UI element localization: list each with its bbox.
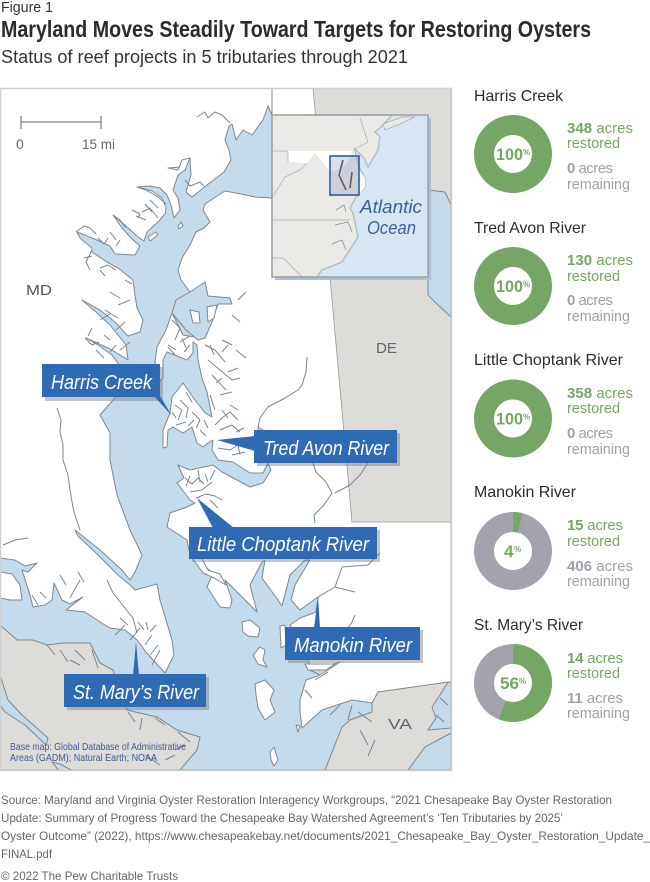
state label DE: DE: [376, 340, 397, 357]
stats: Manokin River: [567, 517, 633, 590]
water: Rappahannock: [0, 675, 48, 745]
stats: Little Choptank River: remaining: [567, 441, 630, 458]
source note: Update: Summary of Progress Toward the Chesapeake Bay Watershed Agreement’s ‘Ten Tributaries by 2025’: [1, 811, 563, 825]
source note: [1, 793, 650, 861]
donut chart: Little Choptank River 100%: %: [523, 412, 530, 422]
stats: St. Mary's River: 11 acres: [567, 690, 623, 707]
water: Delaware Bay: [428, 190, 451, 317]
donut chart: Harris Creek 100%: [484, 125, 542, 183]
donut chart: Tred Avon River 100%: %: [523, 280, 530, 289]
donut chart: Tred Avon River 100%: [484, 257, 542, 315]
water: Chester and inner rivers: [172, 282, 232, 340]
donut chart: St. Mary's River 56%: [484, 654, 542, 712]
callout: St. Mary's River: [64, 642, 209, 710]
creeks: [3, 112, 448, 765]
panel: Harris Creek: [474, 88, 633, 193]
stats: Little Choptank River: [567, 385, 633, 458]
panel: St. Mary's River: [474, 617, 630, 722]
callout: Little Choptank River: Little Choptank River: [197, 534, 370, 556]
stats: Manokin River: remaining: [567, 573, 630, 590]
source note: Source: Maryland and Virginia Oyster Restoration Interagency Workgroups, “2021 Chesapeake Bay Oyster Restoration: [1, 793, 612, 807]
stats: Tred Avon River: remaining: [567, 308, 630, 325]
land: Eastern Shore Virginia: [325, 682, 451, 770]
base map credit: Areas (GADM); Natural Earth; NOAA: [10, 752, 157, 764]
land: Delaware: [313, 88, 451, 522]
panel: Tred Avon River: [474, 220, 633, 325]
stats: St. Mary's River: 14 acres: [567, 650, 623, 667]
panel: Manokin River: [474, 484, 633, 590]
stats: St. Mary's River: remaining: [567, 705, 630, 722]
water: Chesapeake Bay: [0, 106, 451, 770]
source note: Oyster Outcome” (2022), https://www.chesapeakebay.net/documents/2021_Chesapeake_Bay_Oyster_Restoration_Update_: [1, 829, 650, 843]
scale bar: 0: [16, 136, 24, 152]
stats: Little Choptank River: 0 acres: [567, 425, 613, 442]
callout: Tred Avon River: Tred Avon River: [263, 438, 390, 460]
panel: Little Choptank River: Little Choptank River: [474, 352, 624, 369]
islands: [190, 310, 200, 323]
stats: Tred Avon River: 0 acres: [567, 292, 613, 309]
stats: Manokin River: 15 acres: [567, 517, 623, 534]
stats: Harris Creek: 0 acres: [567, 160, 613, 177]
base map credit: [10, 741, 186, 764]
donut chart: Tred Avon River 100%: 100: [496, 277, 523, 296]
land: Eastern Shore: [155, 88, 451, 728]
scale bar: [16, 116, 115, 152]
panel: map: [0, 88, 452, 772]
donut chart: Little Choptank River 100%: 100: [496, 410, 523, 428]
callout: St. Mary's River: St. Mary’s River: [73, 682, 200, 704]
subtitle: Status of reef projects in 5 tributaries through 2021: [1, 46, 408, 67]
state label VA: VA: [388, 716, 412, 733]
Atlantic Ocean label: Atlantic: [359, 196, 423, 217]
donut chart: St. Mary's River 56%: %: [519, 677, 526, 686]
panel: St. Mary's River: St. Mary’s River: [474, 617, 584, 634]
donut chart: St. Mary's River 56%: 56: [500, 674, 519, 693]
callout: Little Choptank River: [189, 498, 380, 562]
panel: Tred Avon River: Tred Avon River: [474, 220, 587, 237]
donut chart: Manokin River 4%: 4: [504, 542, 514, 561]
stats: Harris Creek: restored: [567, 135, 620, 152]
donut chart: Harris Creek 100%: 100: [496, 145, 523, 164]
base map credit: Base map: Global Database of Administrative: [10, 741, 186, 753]
stats: Little Choptank River: restored: [567, 400, 620, 417]
inset locator map: Ocean: [367, 217, 416, 238]
panel: Little Choptank River: [474, 352, 633, 458]
stats: St. Mary's River: restored: [567, 665, 620, 682]
panel: Harris Creek: Harris Creek: [474, 88, 564, 105]
stats: Manokin River: restored: [567, 533, 620, 550]
stats: Tred Avon River: restored: [567, 268, 620, 285]
donut chart: Manokin River 4%: %: [514, 545, 521, 554]
state label MD: MD: [26, 282, 52, 299]
callout: Manokin River: [285, 597, 423, 663]
stats: Little Choptank River: 358 acres: [567, 385, 633, 402]
callout: Tred Avon River: [217, 430, 400, 466]
stats: St. Mary's River: [567, 650, 630, 722]
source note: FINAL.pdf: [1, 847, 53, 861]
panel: Manokin River: Manokin River: [474, 484, 577, 501]
stats: Tred Avon River: 130 acres: [567, 252, 633, 269]
stats: Harris Creek: [567, 120, 633, 193]
stats: Tred Avon River: [567, 252, 633, 325]
land: Northern Neck Virginia: [0, 625, 200, 770]
callout: Harris Creek: Harris Creek: [51, 372, 153, 394]
inset locator map: [272, 115, 431, 280]
stats: Manokin River: 406 acres: [567, 558, 633, 575]
stats: Harris Creek: remaining: [567, 176, 630, 193]
callout: Manokin River: Manokin River: [294, 635, 413, 657]
callout: Harris Creek: [42, 364, 172, 416]
donut chart: Manokin River 4%: [484, 522, 542, 580]
donut chart: Harris Creek 100%: %: [523, 148, 530, 157]
figure label: Figure 1: [1, 0, 53, 16]
donut chart: Little Choptank River 100%: [484, 390, 542, 448]
stats: Harris Creek: 348 acres: [567, 120, 633, 137]
scale bar: 15 mi: [82, 136, 115, 152]
